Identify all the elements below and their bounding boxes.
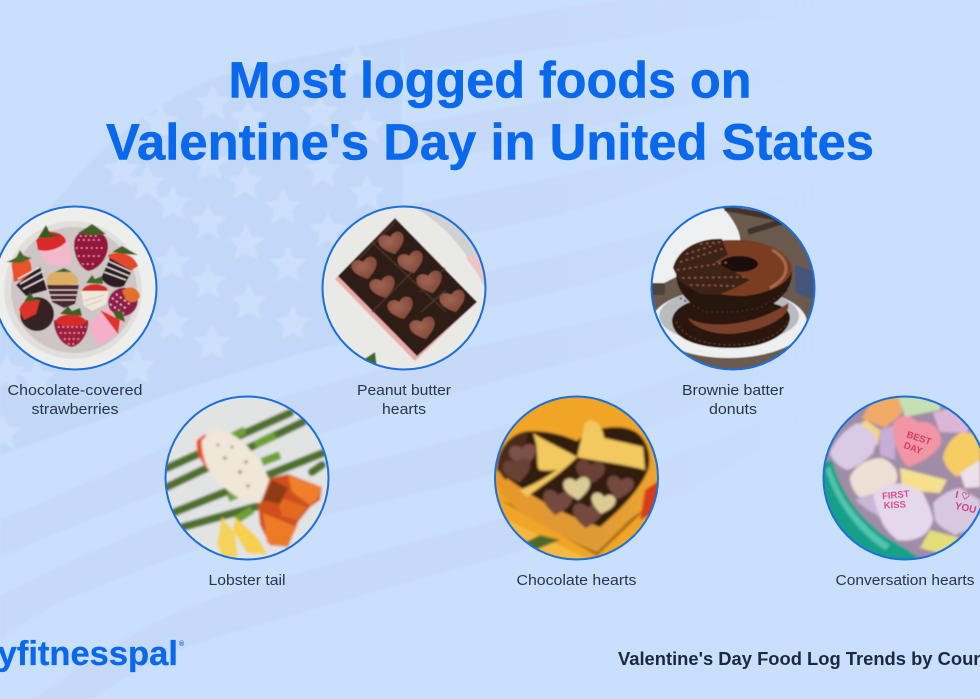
- chocolates: [508, 442, 536, 463]
- red accent: [640, 480, 660, 520]
- lemon wedges: [217, 517, 238, 558]
- bottom sprinkle: [54, 320, 88, 347]
- heart box wall: [496, 450, 650, 553]
- food: chocolate-covered strawberries: [0, 206, 157, 418]
- label: [357, 382, 451, 418]
- ribbon: [520, 420, 645, 497]
- upper donut: [676, 240, 792, 316]
- food: conversation hearts: DAY: [902, 440, 924, 457]
- pink left top: [40, 237, 72, 266]
- striped right top: [108, 253, 138, 274]
- heart box interior: [497, 427, 650, 527]
- logo: myfitnesspal: ®: [179, 640, 185, 648]
- food: conversation hearts: FIRST: [882, 489, 910, 502]
- plate: [651, 288, 807, 358]
- food: conversation hearts: I ♡: [954, 490, 971, 503]
- lobster shell: [195, 433, 210, 471]
- dark chocolate: [20, 297, 54, 331]
- right sprinkle: [108, 287, 138, 317]
- title: [106, 52, 874, 170]
- food: lobster tail: [163, 394, 331, 589]
- sprinkled top: [74, 230, 108, 271]
- label: [8, 382, 142, 418]
- label: Lobster tail: [208, 572, 286, 589]
- food: conversation hearts: [815, 394, 980, 589]
- hearts: [350, 230, 468, 342]
- chocolate box: [335, 276, 472, 361]
- center white: [82, 284, 108, 292]
- center striped: [47, 271, 78, 287]
- candy pile: [824, 398, 980, 558]
- label: Chocolate hearts: [516, 572, 636, 589]
- label: [682, 382, 784, 418]
- label: Conversation hearts: [836, 572, 974, 589]
- label: Chocolate-covered: [8, 382, 142, 399]
- pink bottom: [90, 308, 124, 345]
- lower donut: [672, 298, 790, 348]
- title: Valentine's Day in United States: [106, 114, 874, 170]
- label: Peanut butter: [357, 382, 451, 399]
- food: peanut butter hearts: [322, 205, 490, 418]
- lobster tail fan: [258, 474, 322, 547]
- candy messages: BEST: [905, 429, 933, 448]
- box shadow: [500, 500, 650, 556]
- label: hearts: [382, 401, 426, 418]
- label: strawberries: [32, 401, 118, 418]
- food: chocolate hearts: [492, 394, 660, 589]
- asparagus: [167, 413, 323, 527]
- food: brownie batter donuts: [650, 205, 815, 418]
- food: conversation hearts: KISS: [884, 499, 906, 512]
- striped left: [12, 256, 32, 282]
- food: conversation hearts: YOU: [954, 501, 977, 516]
- title: Most logged foods on: [228, 52, 752, 108]
- label: Brownie batter: [682, 382, 784, 399]
- label: donuts: [709, 401, 757, 418]
- lobster meat: [202, 428, 271, 503]
